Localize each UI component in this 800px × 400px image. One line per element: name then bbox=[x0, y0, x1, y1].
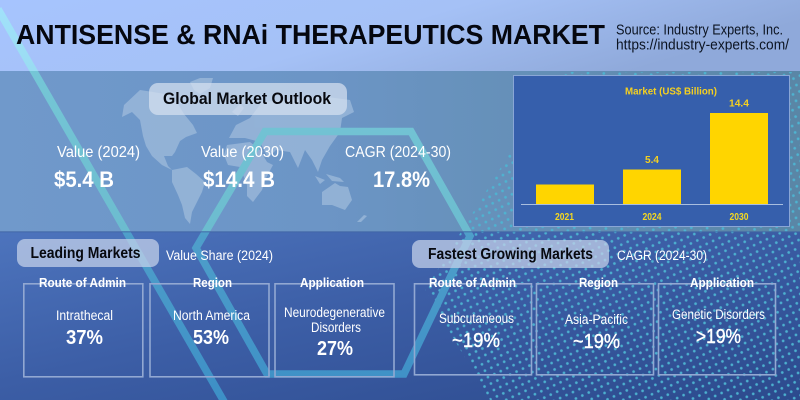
card: route of admin: Route of Admin bbox=[429, 275, 516, 290]
bar: 2024: 2024 bbox=[642, 212, 662, 223]
bar: 2030 bbox=[710, 98, 768, 223]
card: application: Neurodegenerative bbox=[284, 305, 385, 320]
panel: fastest growing markets bbox=[412, 240, 776, 375]
source credit: https://industry-experts.com/ bbox=[616, 38, 790, 54]
source credit bbox=[616, 22, 790, 54]
stat: value 2024 bbox=[54, 144, 140, 192]
bar: 2021 bbox=[536, 184, 594, 223]
heading: fastest growing markets bbox=[412, 240, 609, 268]
card: route of admin: Subcutaneous bbox=[439, 311, 514, 326]
bar: 2024 bbox=[623, 155, 681, 223]
divider shade bbox=[0, 231, 800, 232]
card: region: Region bbox=[579, 275, 618, 290]
card: route of admin bbox=[414, 275, 532, 375]
subheading: value share: Value Share (2024) bbox=[166, 248, 273, 263]
dotted texture bbox=[425, 72, 800, 400]
stat: cagr: 17.8% bbox=[373, 167, 430, 192]
bar: 2030: 14.4 bbox=[729, 98, 749, 110]
panel: leading markets bbox=[17, 239, 394, 377]
heading: fastest growing markets: Fastest Growing Markets bbox=[428, 246, 593, 263]
stat: value 2024: Value (2024) bbox=[57, 144, 140, 161]
stat: value 2030: Value (2030) bbox=[201, 144, 284, 161]
world map bbox=[122, 78, 367, 224]
card: region: Region bbox=[193, 275, 232, 290]
title: ANTISENSE & RNAi THERAPEUTICS MARKET bbox=[16, 19, 605, 50]
card: region bbox=[150, 275, 269, 377]
panel: global market outlook bbox=[54, 83, 451, 192]
card: route of admin bbox=[24, 275, 143, 377]
card: application bbox=[658, 275, 776, 375]
card: application: Genetic Disorders bbox=[672, 307, 765, 322]
card: application: Application bbox=[690, 275, 754, 290]
bar: 2021: 2021 bbox=[555, 212, 574, 223]
card: region: Asia-Pacific bbox=[565, 312, 628, 327]
bar: 2024: 5.4 bbox=[645, 155, 659, 166]
stat: value 2024: $5.4 B bbox=[54, 167, 114, 192]
card: region: ~19% bbox=[573, 331, 620, 353]
card: route of admin: 37% bbox=[66, 327, 103, 349]
card: application: 27% bbox=[317, 338, 353, 360]
heading: global market outlook: Global Market Outlook bbox=[163, 89, 332, 108]
card: route of admin: ~19% bbox=[452, 330, 500, 352]
card: application: Application bbox=[300, 275, 364, 290]
card: application bbox=[275, 275, 394, 377]
card: route of admin: Intrathecal bbox=[56, 308, 113, 323]
stat: cagr: CAGR (2024-30) bbox=[345, 144, 451, 161]
stat: value 2030 bbox=[201, 144, 284, 192]
bar: 2030: 2030 bbox=[730, 212, 749, 223]
hexagon outline and diagonal line bbox=[0, 9, 470, 400]
stat: cagr bbox=[345, 144, 451, 192]
stat: value 2030: $14.4 B bbox=[203, 167, 275, 192]
card: region bbox=[536, 275, 654, 375]
chart title: Market (US$ Billion) bbox=[625, 86, 717, 98]
bar chart: market US$ billion bbox=[514, 76, 790, 226]
heading: leading markets bbox=[17, 239, 159, 267]
subheading: cagr: CAGR (2024-30) bbox=[617, 248, 707, 263]
card: region: 53% bbox=[193, 327, 229, 349]
card: region: North America bbox=[173, 308, 250, 323]
card: application: >19% bbox=[696, 326, 741, 348]
heading: global market outlook bbox=[149, 83, 347, 115]
card: application: Disorders bbox=[311, 320, 361, 335]
card: route of admin: Route of Admin bbox=[39, 275, 126, 290]
heading: leading markets: Leading Markets bbox=[30, 245, 140, 262]
